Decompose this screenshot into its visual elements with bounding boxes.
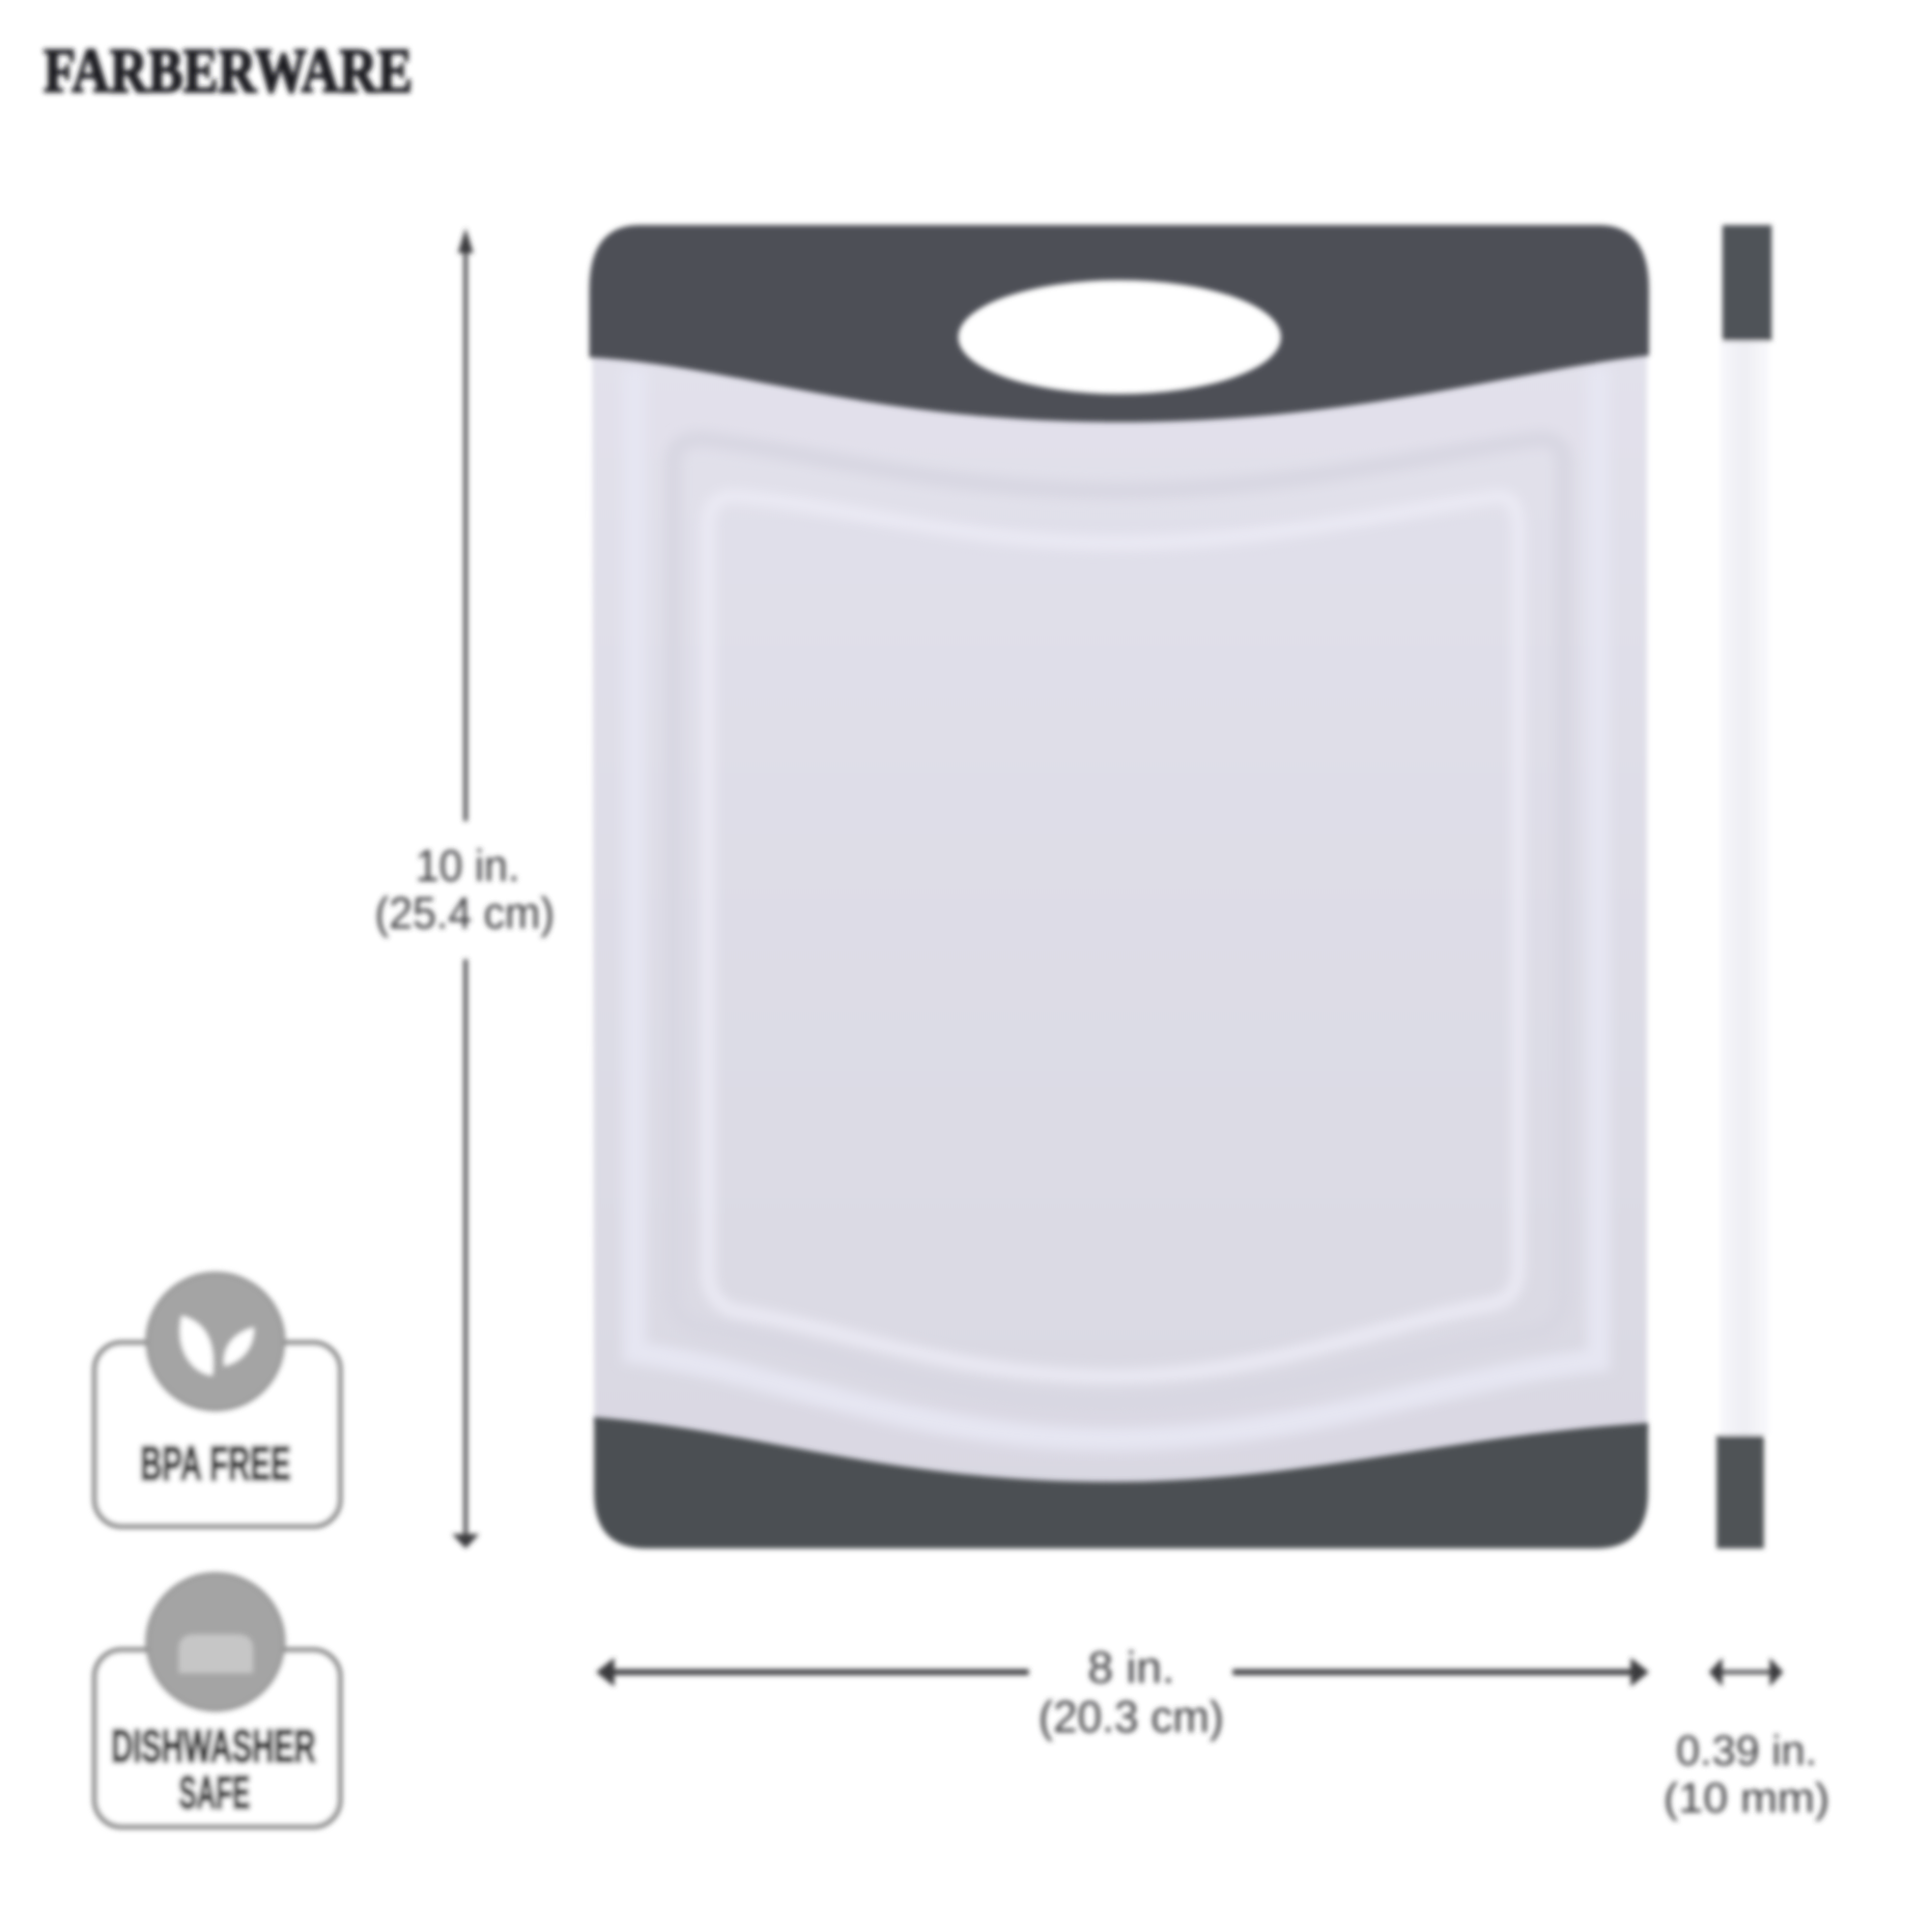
dimension: thickness [1663, 1658, 1830, 1822]
thickness label: 0.39 in. [1676, 1727, 1817, 1775]
icon: leaves [180, 1316, 254, 1376]
width arrow [596, 1658, 1649, 1687]
height arrow [452, 228, 479, 1548]
dimension: width: (20.3 cm) [1038, 1691, 1224, 1742]
dimension: height: (25.4 cm) [375, 888, 554, 938]
badge text: DISHWASHER [111, 1721, 316, 1773]
badge circle [147, 1574, 284, 1711]
bottom dark band [594, 1417, 1648, 1548]
icon: dishwasher [179, 1634, 253, 1673]
side top dark section [1722, 225, 1772, 341]
dimension: thickness: (10 mm) [1663, 1775, 1830, 1822]
width label: 8 in. [1088, 1642, 1175, 1692]
badge: dishwasher safe: SAFE [179, 1768, 250, 1819]
dimension: width [596, 1642, 1649, 1742]
badge circle [147, 1273, 284, 1410]
side bottom dark section [1717, 1435, 1764, 1548]
badge: dishwasher safe [95, 1574, 340, 1827]
badge: BPA free [95, 1273, 340, 1526]
panel: cutting board side view [1717, 225, 1772, 1548]
thickness arrow [1709, 1658, 1783, 1687]
board body [592, 352, 1647, 1486]
height label: 10 in. [415, 840, 520, 891]
panel: cutting board front view [589, 225, 1649, 1548]
badge outline [95, 1343, 340, 1526]
board ridges and juice groove [635, 367, 1599, 1439]
top dark handle band [589, 225, 1649, 422]
badge outline [95, 1650, 340, 1827]
badge text: BPA FREE [140, 1436, 291, 1491]
dimension: height [375, 228, 554, 1548]
brand logo: FARBERWARE [43, 36, 412, 106]
side light core [1720, 341, 1769, 1435]
